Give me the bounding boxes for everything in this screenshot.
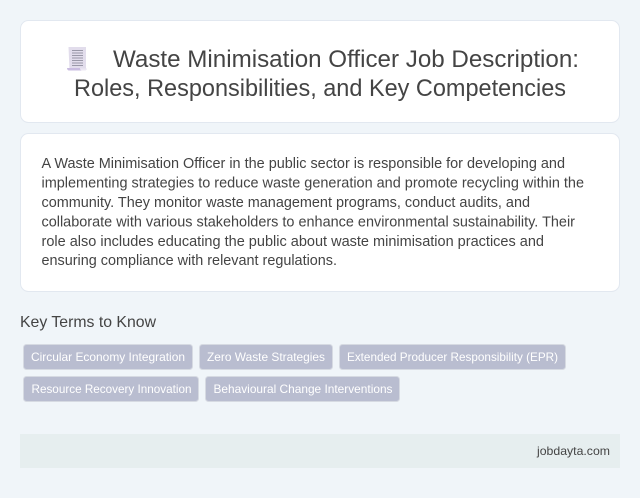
text block: description: community. They monitor waste management programs, conduct audits, and xyxy=(42,195,530,211)
tag: behavioural change xyxy=(206,376,400,402)
heading: title: Roles, Responsibilities, and Key Competencies xyxy=(74,75,566,102)
footer: source: jobdayta.com xyxy=(536,444,610,458)
tag: zero waste: Zero Waste Strategies xyxy=(207,350,325,364)
tag: resource recovery: Resource Recovery Innovation xyxy=(32,382,192,396)
text block: description: A Waste Minimisation Officer in the public sector is responsible for developing and xyxy=(42,156,565,172)
heading: title xyxy=(74,46,579,102)
panel: description card xyxy=(20,134,620,292)
icon: paper scroll xyxy=(67,47,87,70)
tag: circular economy xyxy=(24,344,192,370)
heading: key terms: Key Terms to Know xyxy=(20,314,156,331)
text block: description: ensuring compliance with relevant regulations. xyxy=(42,253,337,269)
tag: resource recovery xyxy=(24,376,198,402)
tag: circular economy: Circular Economy Integration xyxy=(31,350,185,364)
tag list: key terms xyxy=(24,344,566,402)
text block: description: implementing strategies to reduce waste generation and promote recycling within the xyxy=(42,176,584,192)
heading: title: Waste Minimisation Officer Job Description: xyxy=(113,46,579,73)
text block: description: collaborate with various stakeholders to enhance environmental sustainability. Their xyxy=(42,214,575,230)
tag: zero waste xyxy=(200,344,332,370)
tag: extended producer responsibility: Extended Producer Responsibility (EPR) xyxy=(347,350,558,364)
tag: behavioural change: Behavioural Change Interventions xyxy=(214,382,392,396)
footer band xyxy=(20,434,620,468)
text block: description: role also includes educating the public about waste minimisation practices and xyxy=(42,234,544,250)
tag: extended producer responsibility xyxy=(340,344,566,370)
panel: title card xyxy=(20,20,620,122)
text block: description xyxy=(42,156,584,269)
